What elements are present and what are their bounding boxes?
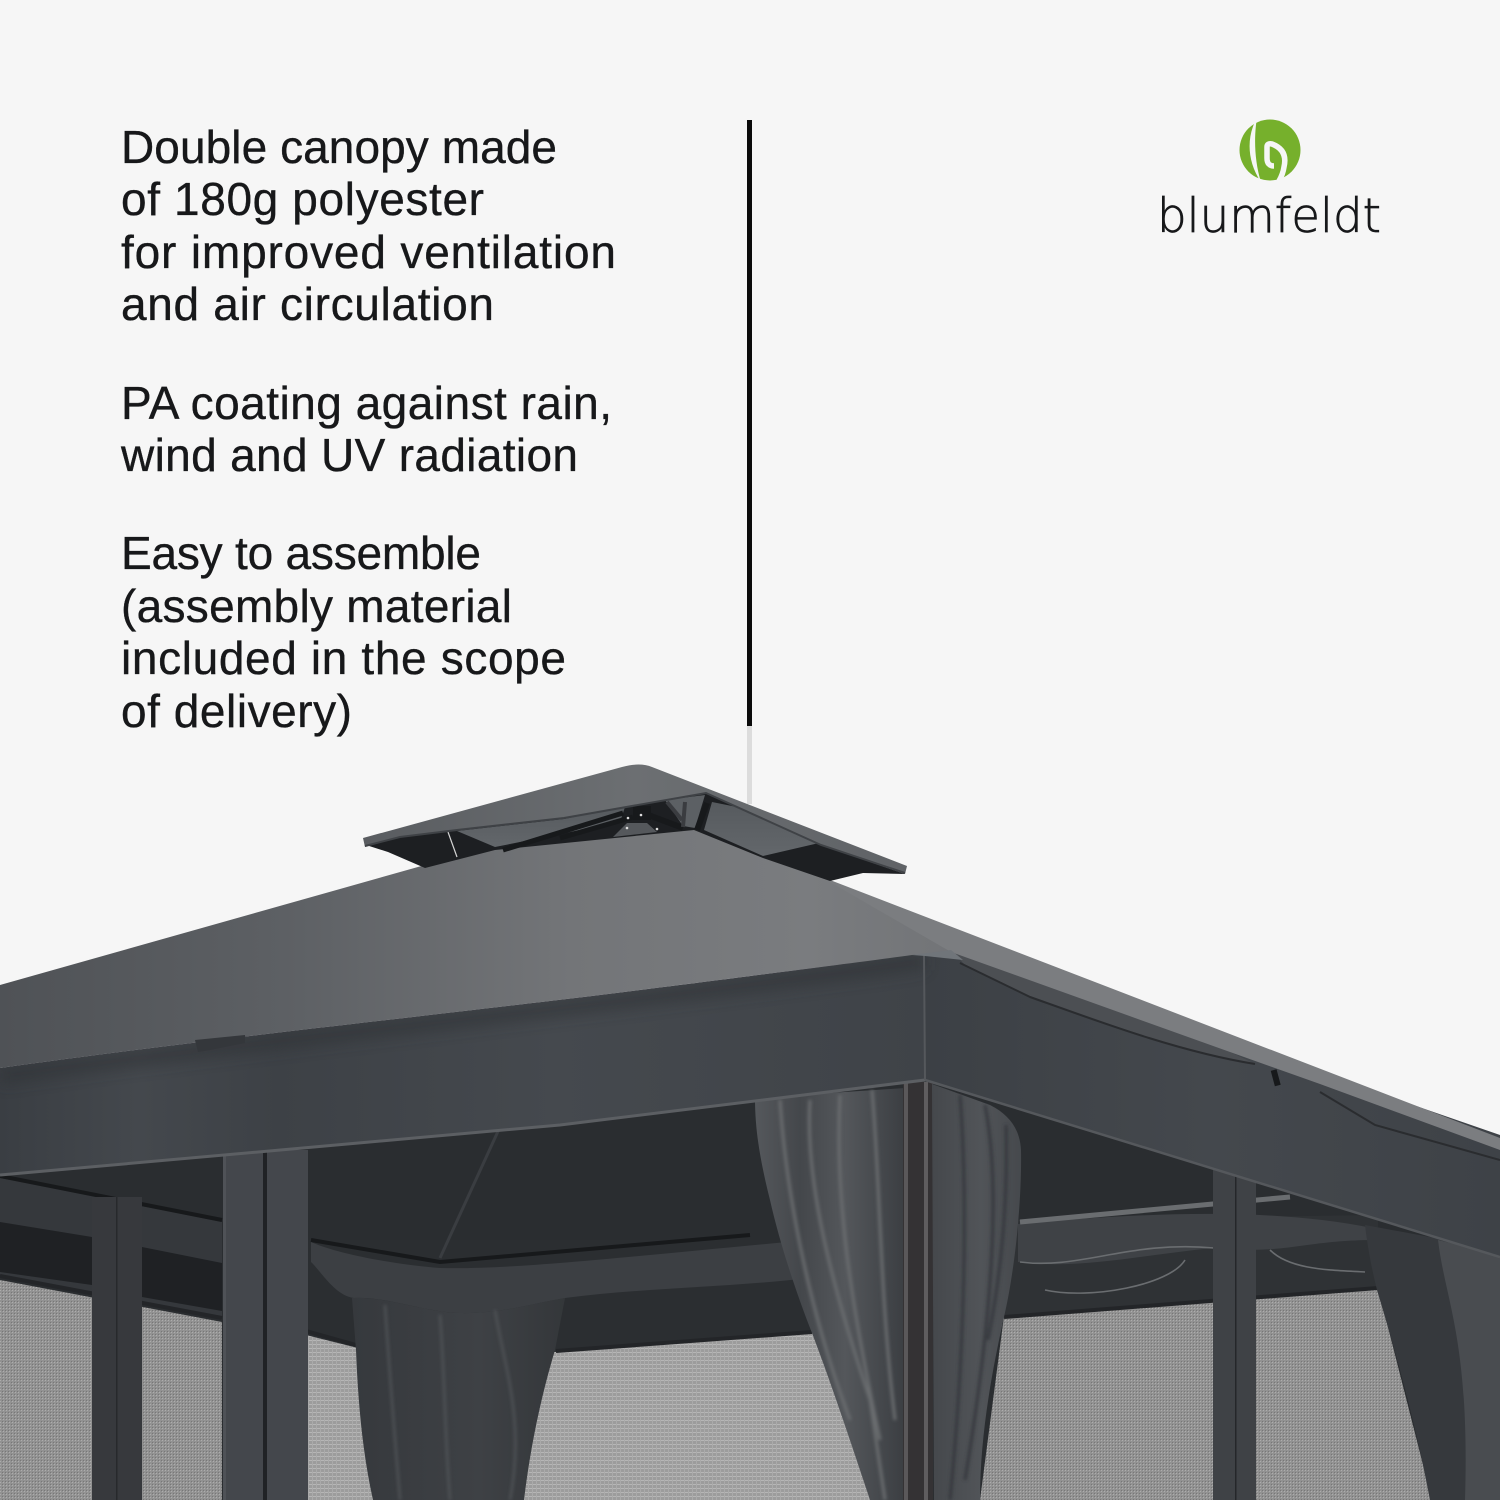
cap left glass window: [457, 807, 625, 847]
feature: easy assembly: included in the scope: [121, 632, 566, 684]
front valance corner seam: [924, 955, 925, 1080]
cap right glass window: [704, 802, 819, 856]
left curtain: [352, 1298, 565, 1500]
clip on right roof: [1271, 1069, 1281, 1086]
feature: easy assembly: [121, 527, 566, 737]
cap small rear window: [665, 795, 705, 828]
inner valance right: [1018, 1214, 1378, 1264]
cap top surface: [363, 764, 907, 874]
back wall band left: [0, 1178, 222, 1320]
feature: double canopy: and air circulation: [121, 278, 494, 330]
main roof: [0, 826, 951, 1068]
mesh panel centre: [306, 1332, 880, 1500]
far right curtain lighter fold: [1438, 1240, 1500, 1500]
scalloped seam right: [1020, 1247, 1365, 1293]
feature: double canopy: [121, 121, 616, 330]
cap centre hub: [613, 806, 658, 837]
feature: double canopy: of 180g polyester: [121, 173, 484, 225]
right valance: [925, 945, 1500, 1257]
front valance lower hem: [0, 1080, 925, 1175]
right roof rim: [756, 853, 1500, 1150]
front valance: [0, 952, 925, 1175]
back wall dark band right: [1004, 1215, 1378, 1320]
ceiling rib: [440, 1127, 500, 1258]
upper canopy: [363, 764, 907, 881]
large curtain right panel: [932, 1084, 1021, 1500]
mesh frame lines: [0, 1276, 1378, 1351]
inner valance centre: [311, 1240, 810, 1313]
corner pole: [903, 1082, 933, 1500]
right valance lower hem: [925, 1080, 1500, 1257]
right pole: [1213, 1170, 1256, 1500]
vertical callout line: [747, 120, 752, 804]
left rail: [0, 1176, 750, 1262]
feature: double canopy: Double canopy made: [121, 121, 557, 173]
cap frame struts: [448, 802, 707, 857]
feature: PA coating: PA coating against rain,: [121, 377, 612, 429]
feature: easy assembly: Easy to assemble: [121, 527, 481, 579]
far right curtain: [1365, 1225, 1500, 1500]
feature: double canopy: for improved ventilation: [121, 226, 616, 278]
gazebo illustration: [0, 764, 1500, 1500]
roof corner trim: [912, 950, 963, 960]
front roof clip: [195, 1035, 245, 1052]
large curtain left panel: [755, 1088, 905, 1500]
text block: feature list: [120, 121, 616, 737]
cap underside dark: [366, 793, 905, 881]
feature: PA coating: [120, 377, 612, 481]
large curtain left folds: [780, 1090, 895, 1500]
icon: green b emblem: [1240, 118, 1300, 182]
ceiling underside: [0, 1075, 1500, 1500]
feature: easy assembly: of delivery): [121, 685, 352, 737]
feature: PA coating: wind and UV radiation: [120, 429, 578, 481]
mesh panel left: [0, 1280, 222, 1500]
back wall dark window left: [0, 1222, 222, 1311]
large curtain right folds: [950, 1095, 1006, 1500]
left pole near: [223, 1150, 308, 1500]
feature: easy assembly: (assembly material: [121, 580, 512, 632]
left pole far: [92, 1197, 142, 1500]
right roof rope: [960, 963, 1500, 1160]
back rail with clips right: [1020, 1197, 1290, 1222]
brand name: blumfeldt: [1157, 189, 1381, 244]
cap edge trim: [365, 793, 905, 873]
left curtain folds: [385, 1305, 515, 1500]
front valance top shadow: [0, 952, 925, 1085]
logo: blumfeldt: [1157, 118, 1381, 244]
back wall dark band centre: [306, 1240, 812, 1352]
right roof slit under rim: [951, 950, 1255, 1064]
mesh panel right: [980, 1288, 1432, 1500]
